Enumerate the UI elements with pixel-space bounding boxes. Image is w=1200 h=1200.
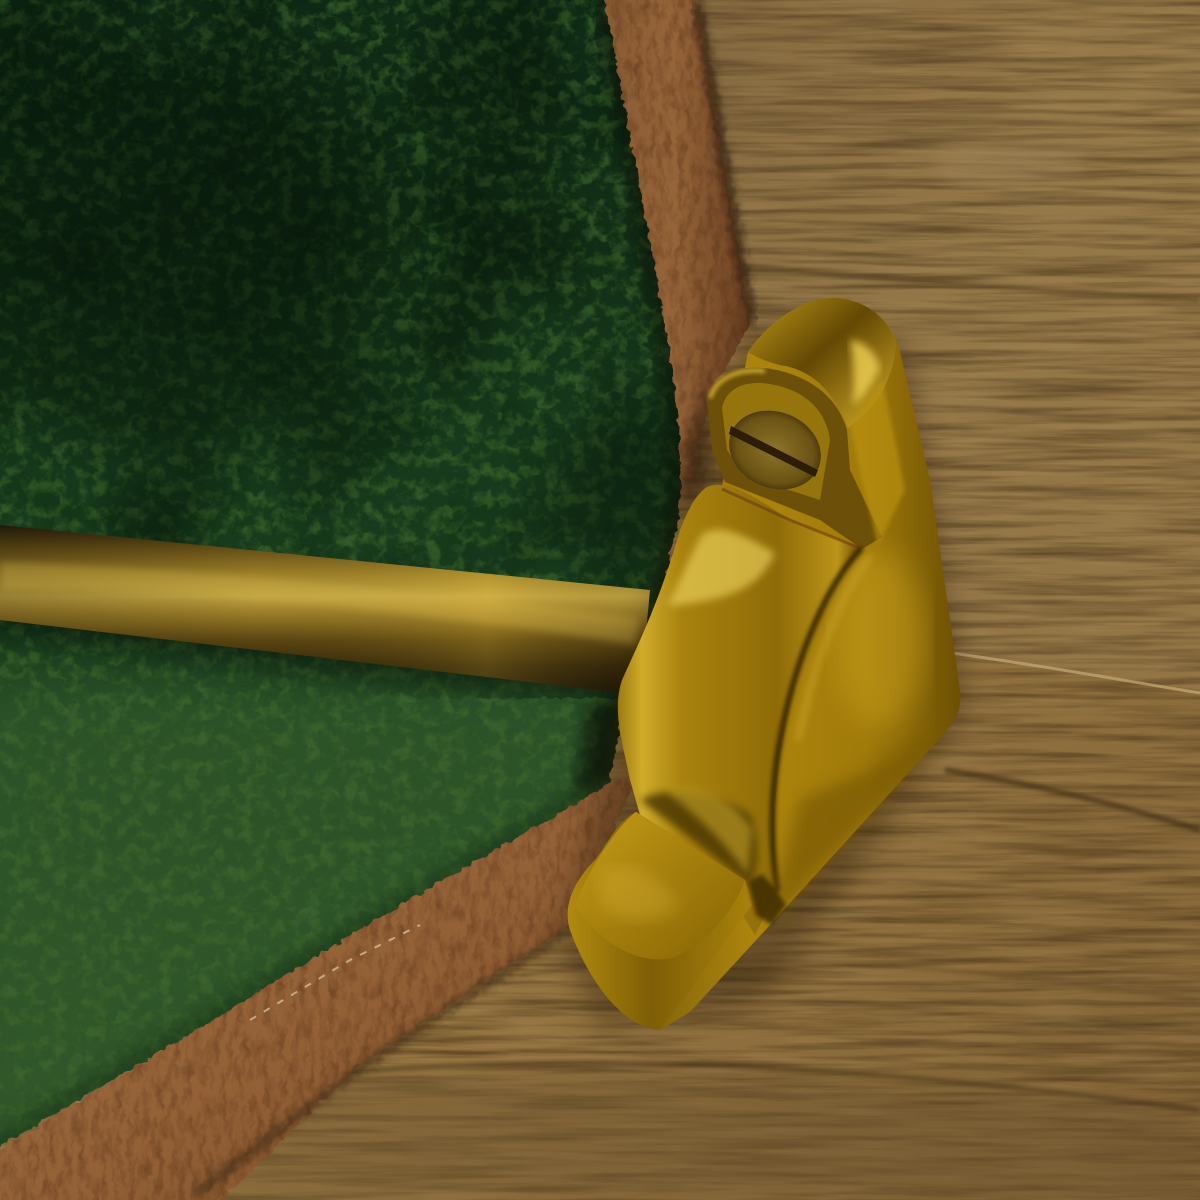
binding stitch line [250,925,420,1020]
bracket back plate [640,298,960,1030]
top cap highlight [748,298,896,428]
green carpet [0,0,720,1170]
brass bracket [560,298,965,1030]
screw [717,397,833,503]
foot [568,812,752,1030]
right lower back plate shading [770,738,940,925]
carpet binding: upper edge [598,0,752,520]
brass stair rod [0,525,650,695]
bracket shadow [560,330,965,1030]
carpet binding: lower edge [0,770,640,1200]
lower reflection [640,792,757,885]
back plate glow [835,550,925,730]
front curved body [618,485,862,935]
notch between foot and plate [748,874,786,925]
right side highlight strip [850,380,905,545]
screw plate [707,368,882,549]
